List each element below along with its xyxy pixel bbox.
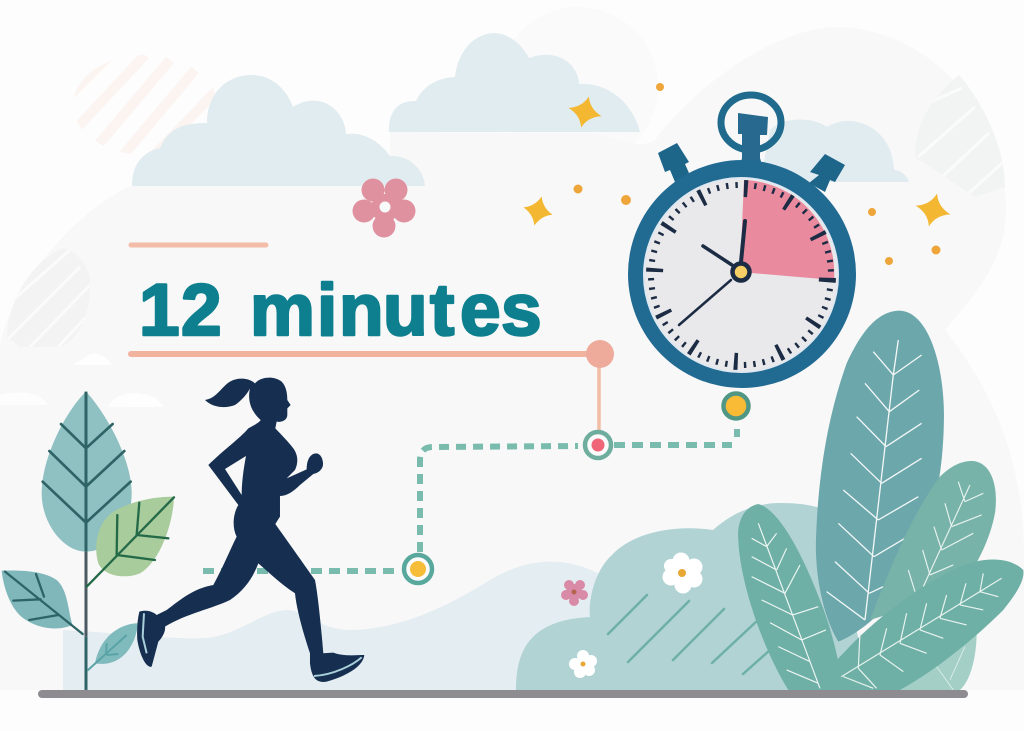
main leaf: [42, 392, 132, 552]
leaf: upper right: [870, 461, 996, 620]
peach line short: [131, 242, 266, 248]
stem: [81, 392, 90, 690]
green leaf: [96, 497, 174, 576]
hill: [63, 562, 640, 690]
right pusher: [809, 154, 845, 192]
main leaf veins: [43, 424, 131, 523]
flower: pink top: [352, 178, 416, 238]
flower: white large: [662, 552, 702, 594]
pale background leaf: [893, 633, 977, 690]
small white clouds: [0, 353, 163, 407]
leaf: left: [738, 504, 843, 690]
cloud: behind stopwatch: [760, 120, 909, 182]
large leaves right: [738, 311, 1023, 690]
lower left leaf veins: [5, 572, 83, 634]
hatched shape: left: [12, 266, 38, 308]
dashed route: [203, 427, 737, 571]
pivot: [732, 264, 750, 280]
title: 12 minutes: [139, 270, 542, 351]
runner: [137, 378, 364, 682]
cloud: left: [132, 75, 425, 186]
green leaf veins: [87, 497, 174, 587]
tick marks: [646, 180, 836, 370]
cloud: top middle: [389, 33, 640, 132]
small leaf vein: [87, 635, 127, 671]
flower: small white: [569, 650, 597, 678]
hatched shape: top right: [954, 76, 1005, 187]
hands: [679, 221, 745, 325]
peach connector: [131, 340, 614, 432]
ground line: [42, 690, 964, 698]
flower: small pink: [561, 580, 588, 606]
face: [644, 178, 838, 372]
top ring: [721, 95, 781, 150]
shoe details: [143, 613, 362, 676]
crown: [738, 113, 768, 165]
node: middle: [585, 432, 611, 458]
small leaf: [95, 623, 138, 664]
case: [628, 160, 856, 388]
leaf: tall: [816, 311, 944, 642]
left pusher: [658, 143, 689, 182]
orange dots: [574, 83, 940, 265]
plant: left: [2, 392, 174, 690]
bush diagonal marks: [608, 595, 770, 674]
pink sector: 12 minutes: [740, 180, 834, 280]
lower left leaf: [2, 570, 73, 628]
leaf: lower right: [817, 560, 1023, 690]
bush: [516, 503, 870, 690]
stopwatch: [628, 95, 856, 388]
sparkle stars: [520, 92, 955, 231]
hatched circle: top left: [74, 55, 215, 154]
node: stopwatch: [724, 394, 748, 418]
node: runner: [404, 555, 432, 583]
